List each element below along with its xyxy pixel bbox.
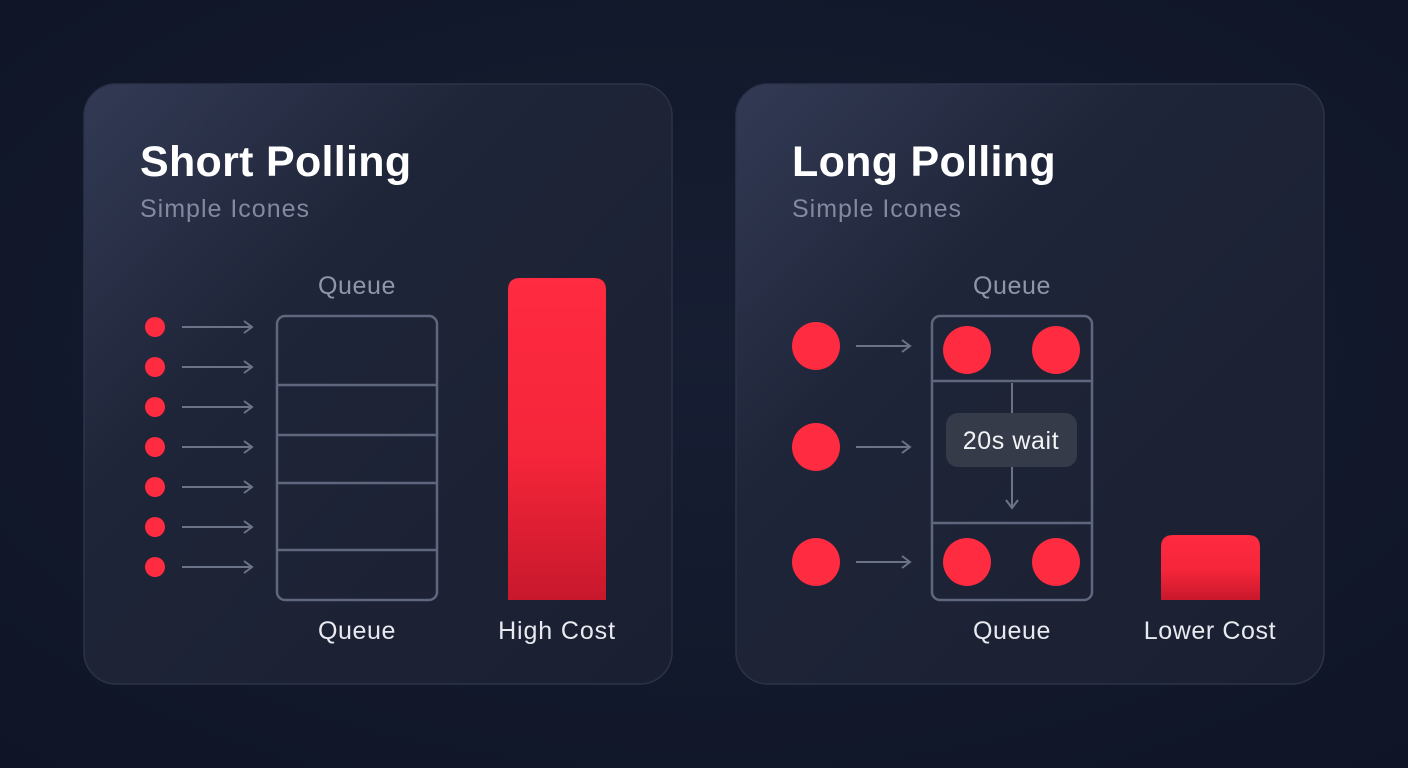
panel: long polling <box>736 84 1324 684</box>
callout: 20s wait: 20s wait <box>963 427 1059 455</box>
label: Queue top: Queue <box>318 272 396 300</box>
title: Long Polling: Long Polling <box>792 138 1056 186</box>
panel: short polling <box>84 84 672 684</box>
queue box <box>277 316 437 600</box>
bar: high cost <box>508 278 606 600</box>
queue box with messages <box>932 316 1092 600</box>
label: Queue top: Queue <box>973 272 1051 300</box>
request dots and arrows <box>792 322 910 586</box>
label: High Cost: High Cost <box>498 617 616 645</box>
callout: 20s wait <box>946 413 1077 467</box>
subtitle: Simple Icones <box>792 195 962 223</box>
label: Queue bottom: Queue <box>318 617 396 645</box>
bar: lower cost <box>1161 535 1260 600</box>
request dots and arrows <box>145 317 252 577</box>
label: Lower Cost: Lower Cost <box>1144 617 1276 645</box>
subtitle: Simple Icones <box>140 195 310 223</box>
title: Short Polling: Short Polling <box>140 138 411 186</box>
label: Queue bottom: Queue <box>973 617 1051 645</box>
